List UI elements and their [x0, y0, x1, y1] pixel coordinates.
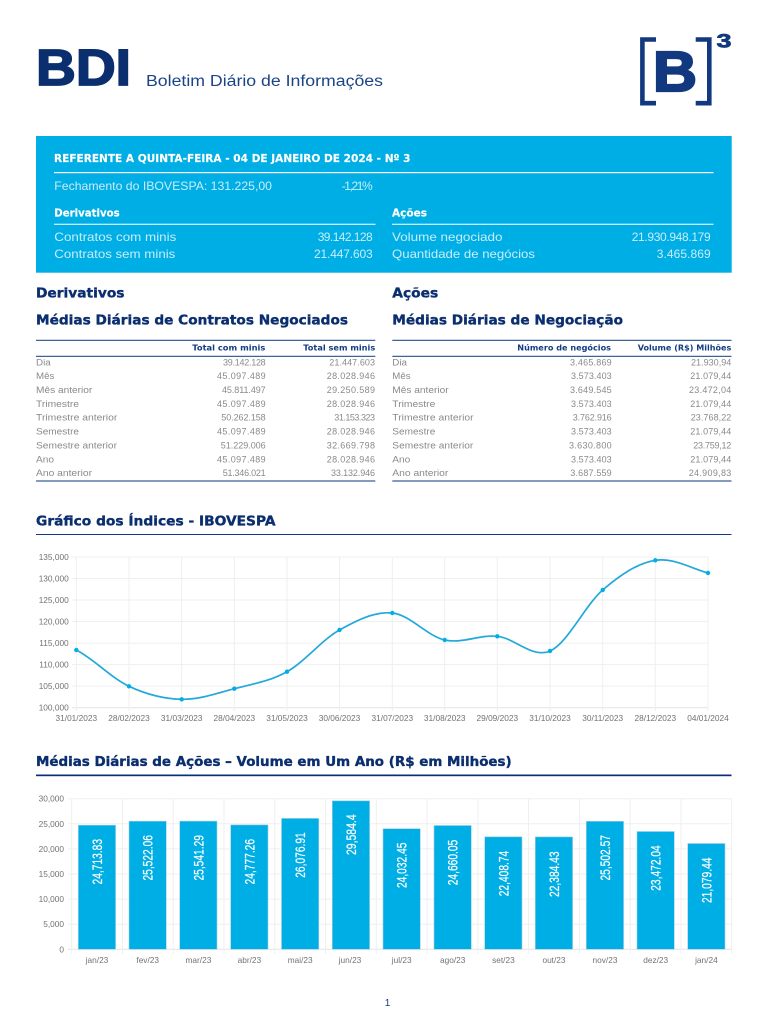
- bar value labels: 22,408.74: [495, 851, 511, 896]
- x axis labels: [85, 955, 718, 965]
- table: contratos negociados: 28.028.946: [327, 454, 375, 464]
- ibovespa close: -1,21%: [342, 179, 373, 193]
- table: contratos negociados: Total sem minis: [303, 342, 375, 352]
- x axis labels: 28/04/2023: [214, 713, 255, 723]
- panel: acoes: [392, 286, 732, 482]
- bar chart: volume: [39, 794, 732, 965]
- table: negociacao: 3.762.916: [573, 413, 612, 423]
- icon: B3 logo: [642, 31, 732, 104]
- table: contratos negociados: Semestre: [36, 427, 79, 437]
- table: negociacao: Semestre: [392, 427, 435, 437]
- table: contratos negociados: 45.811.497: [222, 385, 266, 395]
- bar value labels: 25,541.29: [190, 835, 206, 881]
- table: negociacao: 3.687.559: [570, 468, 612, 478]
- x axis labels: 29/09/2023: [477, 713, 518, 723]
- table: negociacao: 3.573.403: [571, 427, 612, 437]
- table: contratos negociados: Mês: [36, 371, 55, 381]
- table: contratos negociados: 39.142.128: [223, 357, 266, 367]
- data line: [76, 560, 708, 699]
- summary: derivativos: 39.142.128: [318, 230, 373, 244]
- table: contratos negociados: Mês anterior: [36, 385, 92, 395]
- table: contratos negociados: Semestre anterior: [36, 440, 117, 450]
- y axis labels: 25,000: [39, 819, 64, 829]
- table: negociacao: Ano anterior: [392, 468, 448, 478]
- table: negociacao: 21.079,44: [690, 454, 731, 464]
- table: contratos negociados: 28.028.946: [327, 399, 375, 409]
- x axis labels: 04/01/2024: [687, 713, 729, 723]
- y axis labels: 110,000: [39, 660, 69, 670]
- table: negociacao: Ano: [392, 454, 410, 464]
- heading: contratos negociados: Médias Diárias de Contratos Negociados: [36, 313, 348, 328]
- table: contratos negociados: 45.097.489: [217, 454, 266, 464]
- y axis labels: 100,000: [39, 703, 69, 713]
- heading: grafico ibovespa: Gráfico dos Índices - IBOVESPA: [36, 514, 276, 530]
- table: negociacao: Trimestre: [392, 399, 435, 409]
- table: contratos negociados: 51.229.006: [221, 440, 266, 450]
- summary: acoes: 21.930.948.179: [632, 230, 711, 244]
- table: negociacao: 21.930,94: [691, 357, 731, 367]
- y axis labels: 10,000: [39, 894, 64, 904]
- table: negociacao: 3.573.403: [571, 454, 612, 464]
- y axis labels: 30,000: [39, 794, 64, 804]
- title: BDI: BDI: [36, 39, 131, 96]
- table: contratos negociados: Ano: [36, 454, 54, 464]
- table: negociacao: 23.472,04: [689, 385, 731, 395]
- table: negociacao: Número de negócios: [517, 342, 611, 352]
- summary: derivativos: [54, 208, 376, 261]
- bar value labels: 29,584.4: [343, 814, 359, 855]
- table: negociacao: Mês: [392, 371, 411, 381]
- x axis labels: [56, 713, 729, 723]
- table: contratos negociados: 31.153.323: [334, 413, 375, 423]
- table: contratos negociados: 45.097.489: [217, 427, 266, 437]
- page number: 1: [385, 998, 391, 1009]
- x axis labels: jan/24: [694, 955, 718, 965]
- data points: [74, 558, 710, 702]
- table: contratos negociados: 29.250.589: [327, 385, 375, 395]
- table: contratos negociados: 51.346.021: [223, 468, 266, 478]
- ibovespa close: [54, 179, 373, 193]
- heading: volume chart: Médias Diárias de Ações – Volume em Um Ano (R$ em Milhões): [36, 755, 512, 770]
- table: contratos negociados: 33.132.946: [331, 468, 375, 478]
- panel: daily summary: [36, 136, 732, 273]
- x axis labels: 31/03/2023: [161, 713, 203, 723]
- bar value labels: 24,660.05: [445, 840, 461, 885]
- panel heading: REFERENTE A QUINTA-FEIRA - 04 DE JANEIRO DE 2024 - Nº 3: [54, 153, 410, 165]
- table: negociacao: 21.079,44: [690, 427, 731, 437]
- table: negociacao: 3.630.800: [569, 440, 612, 450]
- bar value labels: 26,076.91: [292, 832, 308, 878]
- table: contratos negociados: Dia: [36, 357, 51, 367]
- y axis labels: [39, 794, 64, 954]
- summary: derivativos: Contratos com minis: [54, 230, 176, 244]
- table: negociacao: 24.909,83: [689, 468, 731, 478]
- icon: B3 logo: 3: [716, 31, 732, 52]
- y axis labels: 120,000: [39, 617, 69, 627]
- x axis labels: jul/23: [391, 955, 412, 965]
- subtitle: Boletim Diário de Informações: [146, 73, 383, 90]
- line chart: ibovespa: [39, 552, 729, 723]
- bar value labels: [89, 814, 714, 903]
- y axis labels: 125,000: [39, 595, 69, 605]
- table: negociacao: Trimestre anterior: [392, 413, 474, 423]
- x axis labels: set/23: [492, 955, 515, 965]
- x axis labels: 28/02/2023: [108, 713, 150, 723]
- table: contratos negociados: 45.097.489: [217, 371, 266, 381]
- summary: acoes: Volume negociado: [392, 230, 503, 244]
- x axis labels: mar/23: [185, 955, 212, 965]
- y axis labels: [39, 552, 69, 713]
- table: contratos negociados: Trimestre anterior: [36, 413, 117, 423]
- table: contratos negociados: 32.669.798: [327, 440, 375, 450]
- x axis labels: 31/05/2023: [266, 713, 308, 723]
- x axis labels: fev/23: [136, 955, 159, 965]
- x axis labels: mai/23: [288, 955, 313, 965]
- x axis labels: 31/01/2023: [56, 713, 97, 723]
- table: contratos negociados: Total com minis: [192, 342, 265, 352]
- x axis labels: nov/23: [593, 955, 618, 965]
- table: negociacao: Dia: [392, 357, 407, 367]
- icon: B3 logo: B: [653, 40, 697, 104]
- table: negociacao: 23.759,12: [693, 440, 731, 450]
- table: contratos negociados: 28.028.946: [327, 371, 375, 381]
- table: negociacao: 3.649.545: [570, 385, 612, 395]
- bar value labels: 25,522.06: [140, 835, 156, 881]
- x axis labels: 31/10/2023: [529, 713, 571, 723]
- header: [36, 31, 732, 104]
- bar value labels: 23,472.04: [648, 845, 664, 891]
- x axis labels: 31/07/2023: [372, 713, 413, 723]
- summary: acoes: 3.465.869: [657, 247, 711, 261]
- table: contratos negociados: Ano anterior: [36, 468, 92, 478]
- table: negociacao: 3.465.869: [570, 357, 612, 367]
- summary: acoes: [392, 208, 714, 261]
- y axis labels: 20,000: [39, 844, 64, 854]
- bar value labels: 22,384.43: [546, 851, 562, 897]
- summary: derivativos: Derivativos: [54, 208, 120, 220]
- table: negociacao: 3.573.403: [571, 399, 612, 409]
- x axis labels: jan/23: [85, 955, 109, 965]
- x axis labels: out/23: [542, 955, 566, 965]
- table: contratos negociados: 28.028.946: [327, 427, 375, 437]
- bar value labels: 25,502.57: [597, 835, 613, 881]
- y axis labels: 105,000: [39, 681, 69, 691]
- table: negociacao: Semestre anterior: [392, 440, 473, 450]
- summary: acoes: Ações: [392, 208, 427, 220]
- x axis labels: abr/23: [238, 955, 262, 965]
- table: negociacao: [392, 340, 732, 482]
- table: contratos negociados: 21.447.603: [329, 357, 375, 367]
- x axis labels: ago/23: [440, 955, 466, 965]
- table: negociacao: Mês anterior: [392, 385, 449, 395]
- table: negociacao: 21.079,44: [690, 371, 731, 381]
- y axis labels: 135,000: [39, 552, 69, 562]
- table: negociacao: Volume (R$) Milhões: [638, 342, 731, 352]
- table: negociacao: 3.573.403: [571, 371, 612, 381]
- table: contratos negociados: 50.262.158: [221, 413, 266, 423]
- y axis labels: 15,000: [39, 869, 64, 879]
- x axis labels: 30/11/2023: [582, 713, 624, 723]
- y axis labels: 115,000: [39, 638, 69, 648]
- table: negociacao: 21.079,44: [690, 399, 731, 409]
- ibovespa close: Fechamento do IBOVESPA: 131.225,00: [54, 179, 272, 193]
- bar value labels: 21,079.44: [698, 857, 714, 903]
- table: negociacao: 23.768,22: [691, 413, 731, 423]
- y axis labels: 5,000: [43, 919, 64, 929]
- table: contratos negociados: [36, 340, 375, 482]
- x axis labels: dez/23: [643, 955, 669, 965]
- x axis labels: 28/12/2023: [635, 713, 676, 723]
- table: contratos negociados: 45.097.489: [217, 399, 266, 409]
- x axis labels: jun/23: [338, 955, 362, 965]
- summary: derivativos: Contratos sem minis: [54, 247, 175, 261]
- summary: acoes: Quantidade de negócios: [392, 247, 535, 261]
- bar value labels: 24,713.83: [89, 839, 105, 884]
- summary: derivativos: 21.447.603: [314, 247, 373, 261]
- bars: [78, 801, 725, 949]
- bar value labels: 24,777.26: [241, 839, 257, 884]
- bar value labels: 24,032.45: [394, 842, 410, 888]
- x axis labels: 31/08/2023: [424, 713, 466, 723]
- heading: negociacao: Médias Diárias de Negociação: [392, 313, 623, 328]
- x axis labels: 30/06/2023: [319, 713, 361, 723]
- heading: derivativos: Derivativos: [36, 286, 125, 301]
- table: contratos negociados: Trimestre: [36, 399, 79, 409]
- heading: acoes: Ações: [392, 286, 439, 301]
- y axis labels: 130,000: [39, 574, 69, 584]
- y axis labels: 0: [59, 944, 64, 954]
- panel: derivativos: [36, 286, 375, 482]
